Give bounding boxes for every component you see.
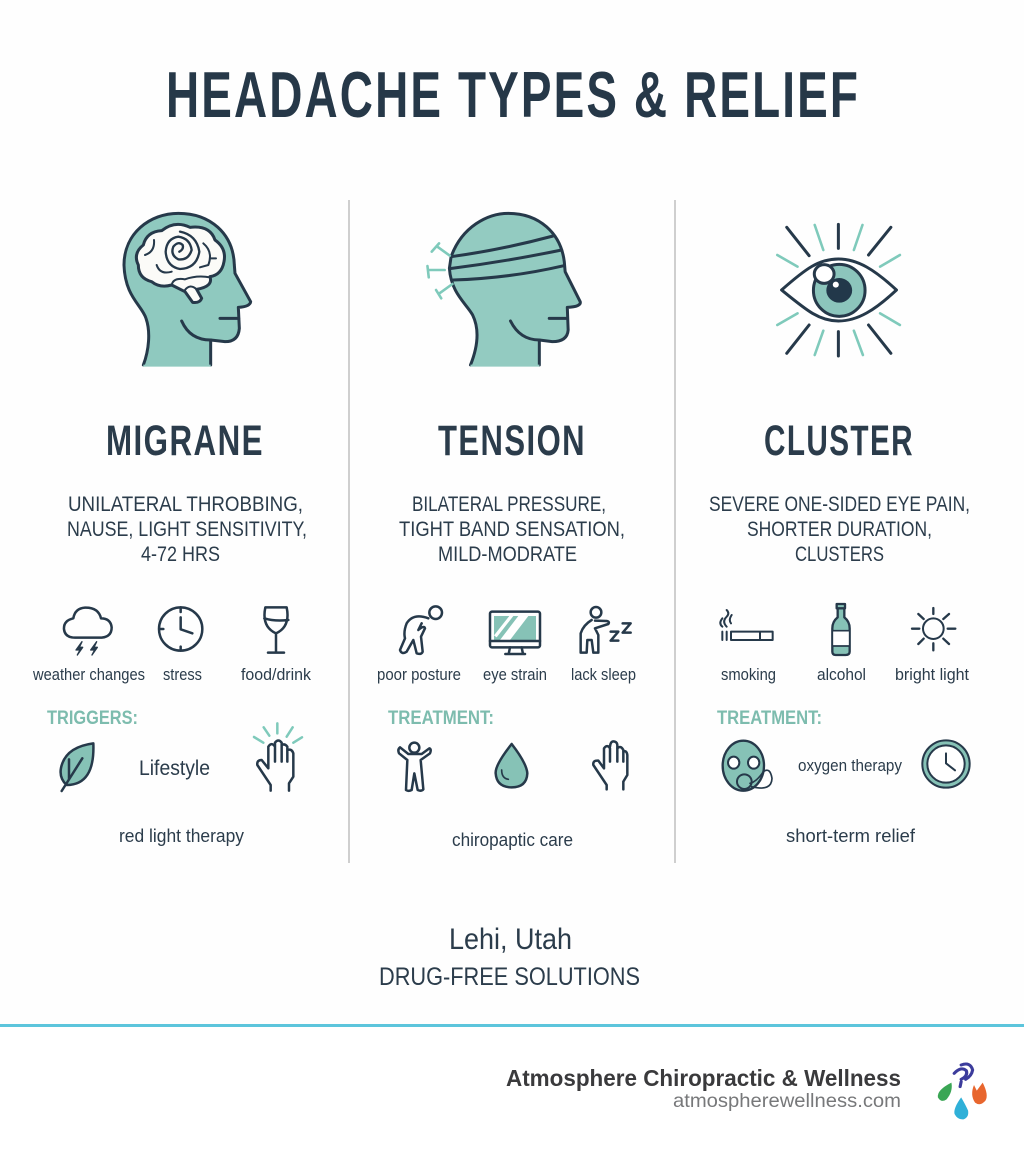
panel: cluster [709,224,970,846]
symptoms: migraine: UNILATERAL THROBBING, [68,493,303,516]
panel: migraine [32,213,311,846]
symptoms: migraine: NAUSE, LIGHT SENSITIVITY, [67,518,307,541]
heading: tension: TENSION [438,417,586,465]
icon: ring clock [922,740,970,788]
label: smoking: smoking [721,665,776,684]
label: red light therapy: red light therapy [119,825,245,846]
label: treatment: TREATMENT: [717,708,822,729]
label: chiropractic care: chiropaptic care [452,829,573,850]
symptoms: tension: BILATERAL PRESSURE, [412,493,606,516]
tagline: DRUG-FREE SOLUTIONS [379,963,640,991]
icon: water drop [496,744,527,787]
footer brand name: Atmosphere Chiropractic & Wellness [506,1065,901,1091]
label: eye strain: eye strain [483,665,547,684]
label: treatment: TREATMENT: [388,708,494,729]
symptoms: tension [399,493,625,566]
symptoms: cluster: SHORTER DURATION, [747,518,932,541]
icon: tired figure with z z [581,607,631,653]
icon: storm cloud [64,608,112,655]
icon: leaf [61,743,93,791]
symptoms: cluster: SEVERE ONE-SIDED EYE PAIN, [709,493,970,516]
label: poor posture: poor posture [377,665,461,684]
label: lack sleep: lack sleep [571,665,636,684]
label: food/drink: food/drink [241,665,311,684]
icon: eye with rays [777,224,900,356]
heading: migraine: MIGRANE [106,417,264,465]
icon: head with tight band [427,213,580,366]
label: short-term relief: short-term relief [786,825,916,846]
label: triggers: TRIGGERS: [47,708,138,729]
label: lifestyle: Lifestyle [139,757,210,780]
label: bright light: bright light [895,665,969,684]
symptoms: tension: TIGHT BAND SENSATION, [399,518,625,541]
icon: stooped figure [400,606,442,654]
heading: cluster: CLUSTER [764,417,914,465]
symptoms: migraine: 4-72 HRS [141,543,220,566]
icon: four elements logo [938,1064,987,1119]
icon: computer monitor [490,612,540,654]
symptoms: migraine [67,493,307,566]
label: alcohol: alcohol [817,665,866,684]
icon: oxygen mask [723,741,772,791]
symptoms: cluster [709,493,970,566]
icon: sun [912,608,955,650]
symptoms: cluster: CLUSTERS [795,543,884,566]
icon: hand [593,741,627,789]
icon: hand with rays [254,723,302,791]
footer website: atmospherewellness.com [673,1090,901,1112]
label: oxygen therapy: oxygen therapy [798,756,902,775]
icon: cigarette [720,610,773,640]
icon: head with spiral brain [124,213,251,366]
icon: clock [159,607,202,651]
icon: stretching figure [398,743,431,791]
icon: bottle [832,604,850,655]
location text: Lehi, Utah [449,923,572,956]
label: stress: stress [163,665,202,684]
label: weather changes: weather changes [32,665,145,684]
symptoms: tension: MILD-MODRATE [438,543,577,566]
icon: wine glass [264,607,288,653]
panel: tension [377,213,636,850]
